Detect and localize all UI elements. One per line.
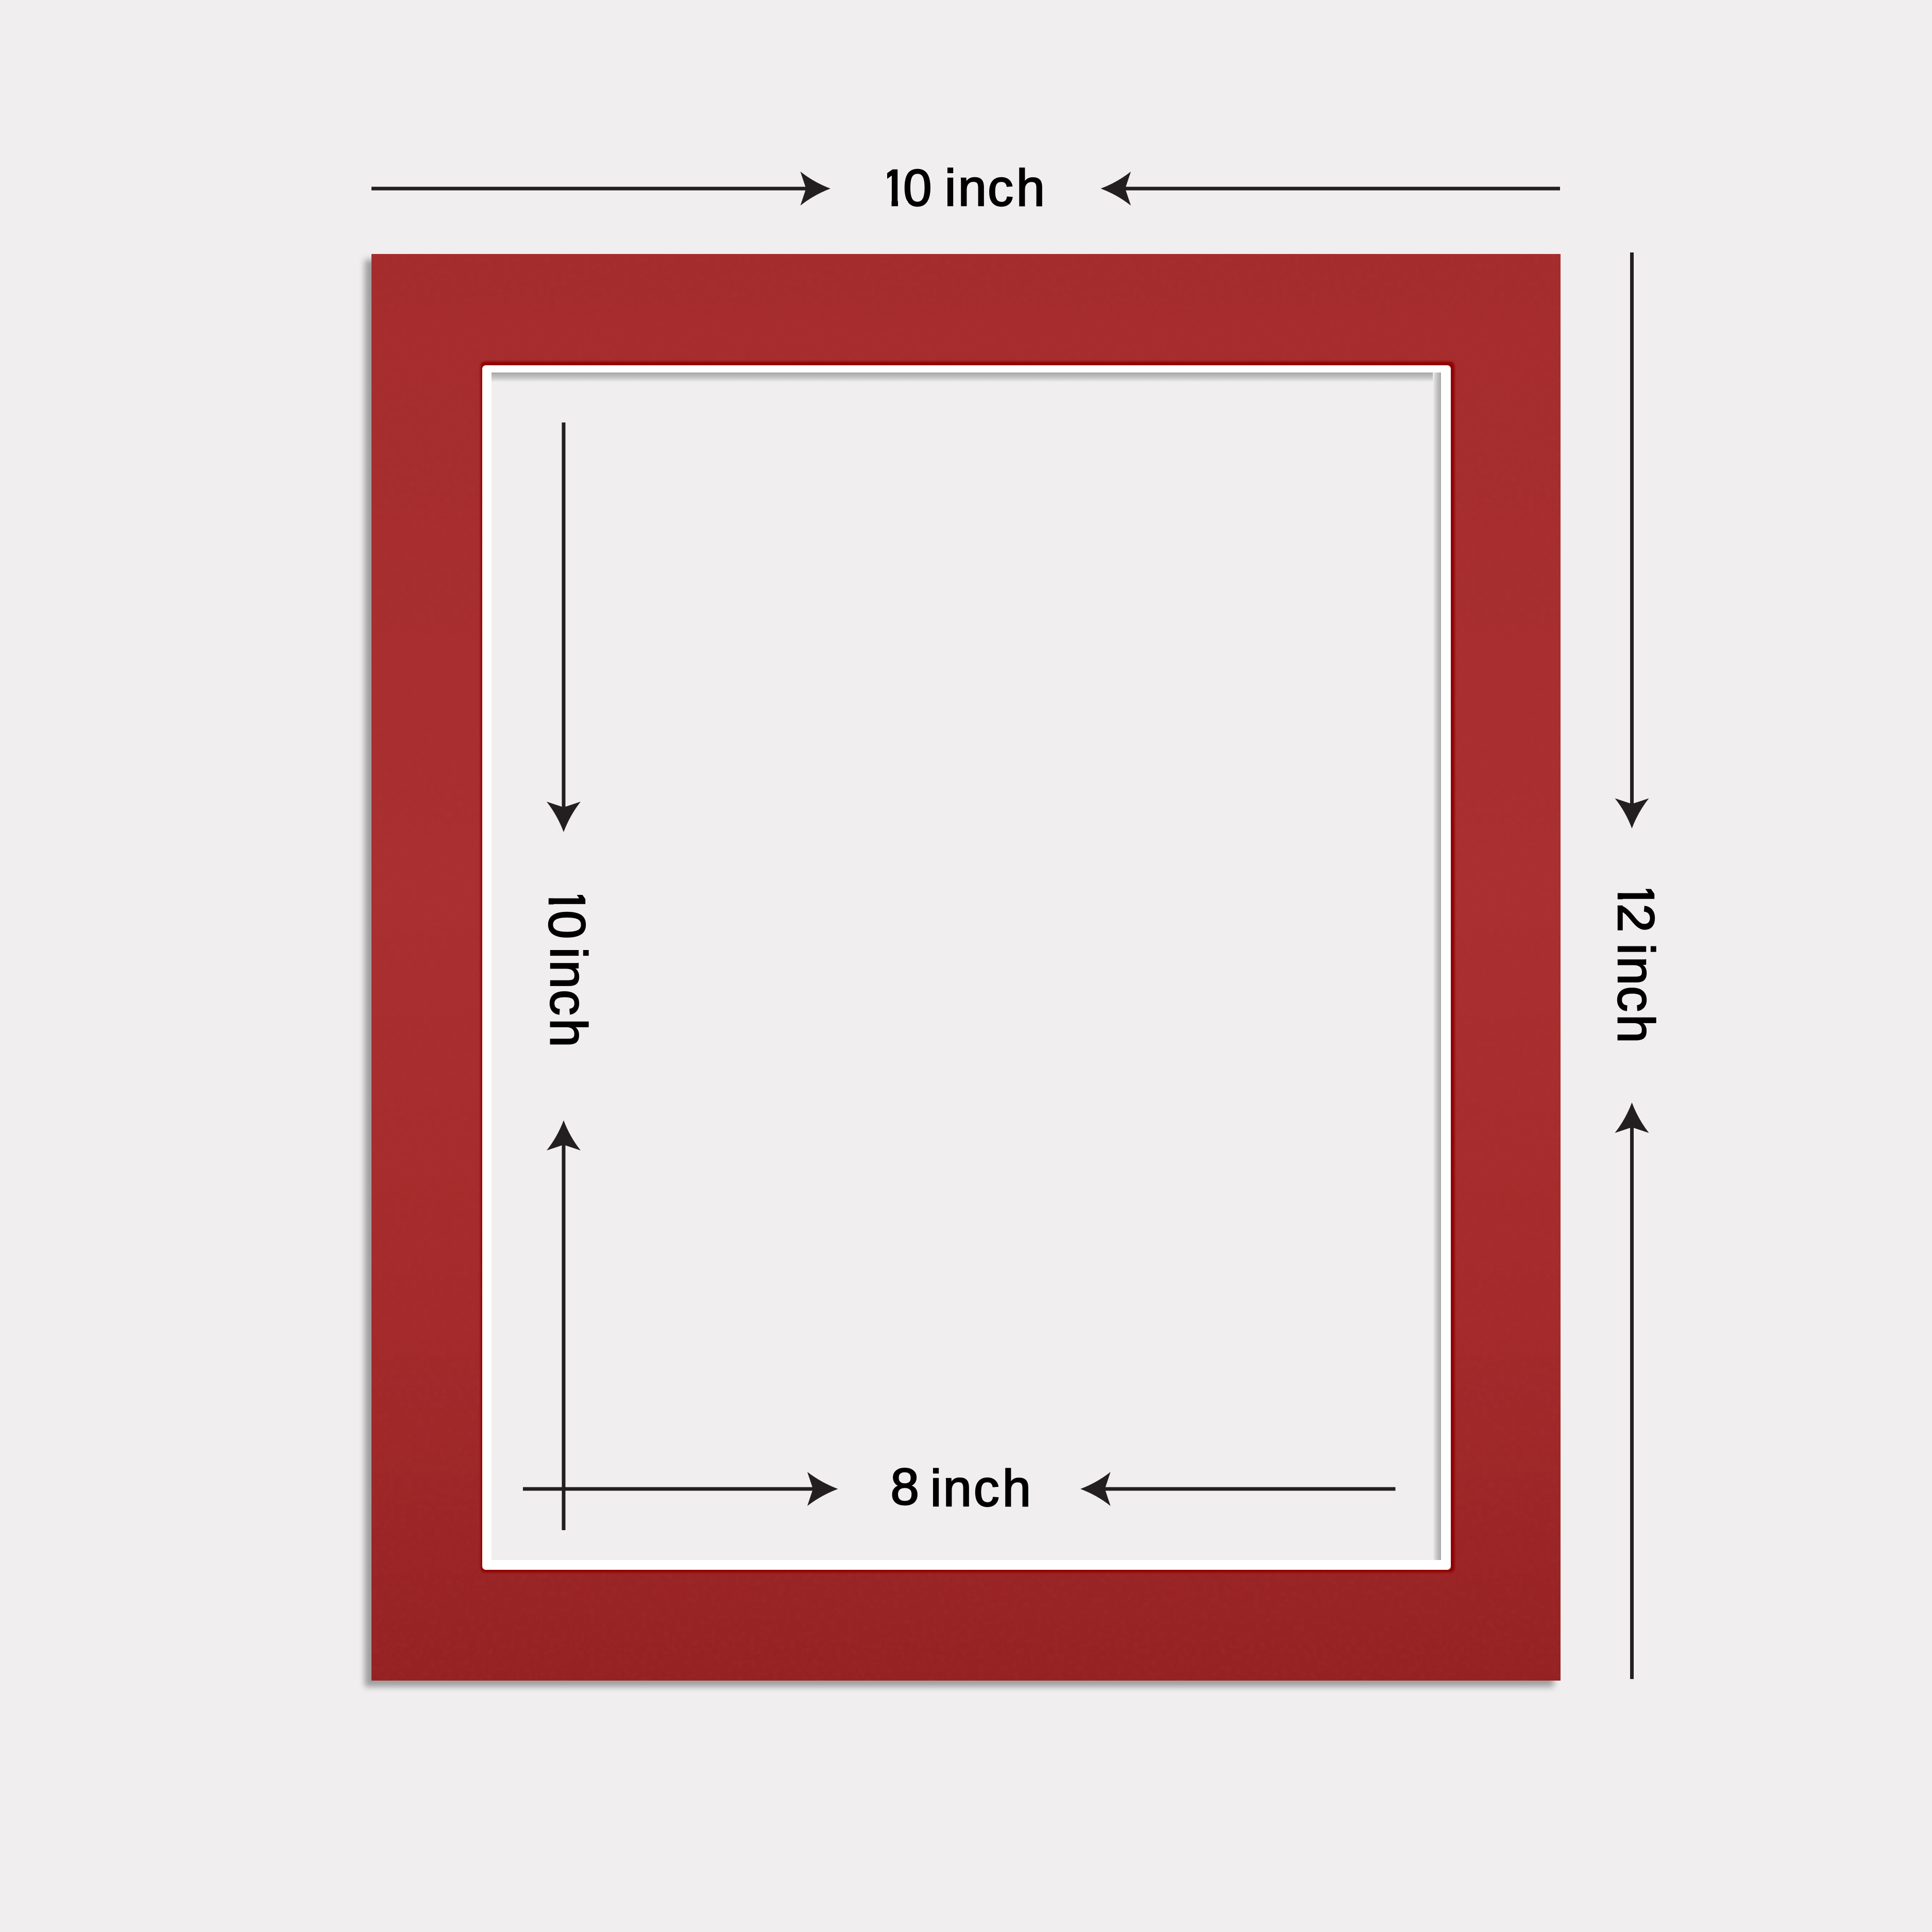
label: 8 inch: 8 [890, 1458, 919, 1516]
arrow: outer width left [371, 172, 831, 206]
panel: red photo mat [365, 254, 1561, 1687]
dimension: outer width 10 inch [371, 167, 1560, 207]
arrow: opening width left [523, 1472, 838, 1506]
label: 12 inch: 12 [1607, 881, 1665, 933]
arrow: opening width right [1080, 1472, 1395, 1506]
dimension: outer height 12 inch [1615, 252, 1656, 1679]
arrow: opening height bottom [547, 1120, 581, 1530]
label: 10 inch: 10 [879, 159, 932, 217]
mat drop shadow [365, 260, 1554, 1687]
arrow: outer width right [1100, 172, 1560, 206]
dimension: opening width 8 inch [523, 1458, 1395, 1517]
label: 12 inch: inch [1607, 943, 1665, 1043]
label: 8 inch: inch [930, 1460, 1031, 1517]
arrow: outer height bottom [1615, 1103, 1649, 1679]
label: 10 inch: inch [945, 159, 1045, 217]
label: 10 inch: 10 [538, 886, 596, 939]
label: 10 inch: inch [539, 947, 597, 1047]
dimension: opening height 10 inch [538, 422, 597, 1530]
arrow: opening height top [547, 422, 581, 832]
mat opening [481, 362, 1454, 1572]
arrow: outer height top [1615, 252, 1649, 828]
mat board [371, 254, 1561, 1681]
